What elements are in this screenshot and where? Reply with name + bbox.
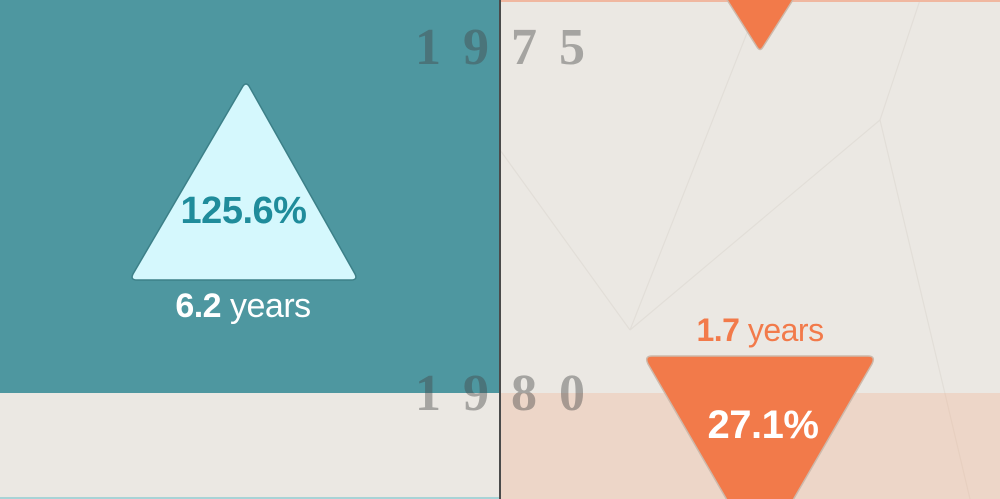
text: 1.7 years: 1.7 years bbox=[696, 312, 824, 348]
icon: big orange down triangle bbox=[646, 355, 874, 499]
top orange line bbox=[501, 0, 1000, 2]
divider bbox=[499, 0, 501, 499]
panel: teal 1975 bbox=[0, 0, 500, 393]
text: 125.6%: 125.6% bbox=[181, 190, 306, 232]
text: 6.2 years: 6.2 years bbox=[175, 287, 311, 325]
bottom teal line left bbox=[0, 497, 499, 499]
icon: small orange triangle top bbox=[726, 0, 794, 50]
year: 1980: 1980 bbox=[415, 365, 607, 422]
background texture lines bbox=[501, 2, 946, 393]
icon: up triangle 125.6% bbox=[132, 83, 356, 281]
text: 27.1%: 27.1% bbox=[708, 403, 818, 447]
bottom band right bbox=[501, 393, 1000, 499]
year: 1975: 1975 bbox=[415, 19, 607, 76]
